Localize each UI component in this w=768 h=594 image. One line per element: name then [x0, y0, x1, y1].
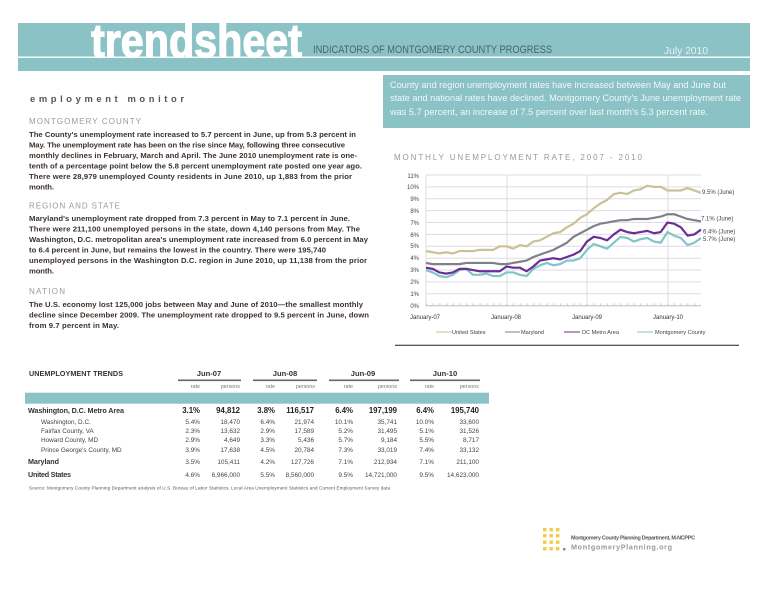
line chart: monthly unemployment rate	[407, 174, 735, 336]
row: United States: 9.5%	[338, 472, 353, 479]
column headers: rate	[191, 384, 200, 390]
paragraph	[29, 130, 362, 192]
row: United States	[28, 470, 479, 479]
row: Washington, D.C. Metro Area: 116,517	[286, 406, 314, 415]
row: Howard County, MD: 5.7%	[338, 437, 353, 444]
table: unemployment trends	[25, 369, 489, 490]
date: July 2010	[664, 46, 708, 57]
column headers: persons	[296, 384, 315, 390]
end labels: 6.4% (June)	[703, 230, 735, 236]
column headers: Jun-08	[273, 369, 297, 378]
row: Prince George's County, MD: 4.5%	[260, 447, 275, 454]
section heading: MONTGOMERY COUNTY	[29, 117, 142, 126]
paragraph: May. The unemployment rate has been on the rise since May, following three consecutive	[29, 140, 346, 150]
row: Washington, D.C.: 21,974	[294, 419, 314, 426]
y axis labels	[407, 174, 420, 310]
subtitle: INDICATORS OF MONTGOMERY COUNTY PROGRESS	[313, 44, 552, 56]
row: Washington, D.C.: Washington, D.C.	[41, 419, 91, 426]
row: Fairfax County, VA: 13,632	[220, 428, 240, 435]
teal band	[25, 393, 489, 404]
row: Washington, D.C.: 5.4%	[185, 419, 200, 426]
row: Howard County, MD: 8,717	[463, 437, 479, 444]
callout: summary: state and national rates have declined. Montgomery County's June unemployment rate	[390, 93, 741, 103]
paragraph: monthly declines in February, March and April. The June 2010 unemployment rate is one-	[29, 151, 357, 160]
paragraph: to 6.4 percent in June, but remains the lowest in the country. There were 195,740	[29, 246, 326, 254]
row: Washington, D.C. Metro Area: 94,812	[216, 406, 241, 415]
paragraph: Maryland's unemployment rate dropped from 7.3 percent in May to 7.1 percent in June.	[29, 214, 350, 223]
row: Maryland: 7.1%	[338, 459, 353, 466]
paragraph	[29, 300, 369, 330]
column headers: Jun-09	[351, 369, 375, 378]
y axis labels: 0%	[410, 304, 420, 310]
logo: Montgomery County Planning Department	[543, 528, 695, 552]
y axis labels: 9%	[410, 197, 420, 203]
row: Prince George's County, MD: 33,019	[377, 447, 397, 454]
row: Washington, D.C.: 10.1%	[335, 419, 353, 426]
y axis labels: 1%	[410, 292, 420, 298]
column headers: persons	[460, 384, 479, 390]
row: Maryland: 3.5%	[185, 459, 200, 466]
paragraph: The County's unemployment rate increased to 5.7 percent in June, up from 5.3 percent in	[29, 130, 356, 139]
row: Howard County, MD: 3.3%	[260, 437, 275, 444]
row: Washington, D.C. Metro Area: 3.8%	[257, 406, 275, 415]
column headers: persons	[378, 384, 397, 390]
row: Fairfax County, VA: 5.1%	[419, 428, 434, 435]
row: Prince George's County, MD: Prince George's County, MD	[41, 447, 122, 454]
row: Maryland: 7.1%	[419, 459, 434, 466]
text block: Montgomery County	[29, 117, 362, 192]
row: Fairfax County, VA	[41, 428, 479, 435]
row: Howard County, MD: 5.5%	[419, 437, 434, 444]
row: Washington, D.C.: 33,600	[459, 419, 479, 426]
row: United States: 5.5%	[260, 472, 275, 479]
y axis labels: 5%	[410, 244, 420, 250]
y axis labels: 3%	[410, 268, 420, 274]
header banner	[18, 14, 750, 71]
icon: yellow square grid	[543, 528, 565, 550]
line: Montgomery County	[426, 232, 701, 277]
row: Fairfax County, VA: 5.2%	[338, 428, 353, 435]
column headers: rate	[266, 384, 275, 390]
row: United States: 6,966,000	[212, 472, 240, 479]
row: United States: 14,623,000	[447, 472, 479, 479]
paragraph: There were 28,979 unemployed County residents in June 2010, up 1,883 from the prior	[29, 172, 352, 181]
source note: Source: Montgomery County Planning Department analysis of U.S. Bureau of Labor Statistics, Local Area Unemployment Statistics and Current Employment Survey data	[29, 486, 390, 490]
row: United States: 8,560,000	[286, 472, 314, 479]
row: United States: 4.6%	[185, 472, 200, 479]
row: Howard County, MD: 4,649	[224, 437, 240, 444]
row: Prince George's County, MD: 20,784	[294, 447, 314, 454]
department name: Montgomery County Planning Department, M-NCPPC	[571, 536, 695, 542]
row: Prince George's County, MD: 33,132	[459, 447, 479, 454]
end labels: 5.7% (June)	[703, 237, 735, 243]
paragraph: month.	[29, 182, 54, 192]
row: United States: United States	[28, 470, 71, 479]
row: Washington, D.C. Metro Area: 197,199	[369, 406, 398, 415]
column headers: rate	[344, 384, 353, 390]
x axis labels	[410, 315, 684, 321]
row: Washington, D.C. Metro Area: 3.1%	[182, 406, 200, 415]
row: Maryland: 212,934	[374, 459, 397, 466]
row: Prince George's County, MD: 7.4%	[419, 447, 434, 454]
row: Washington, D.C.: 10.0%	[416, 419, 434, 426]
chart title: MONTHLY UNEMPLOYMENT RATE, 2007 - 2010	[394, 153, 643, 162]
row: Howard County, MD: Howard County, MD	[41, 437, 98, 444]
paragraph	[29, 214, 369, 276]
row: Howard County, MD: 9,184	[381, 437, 397, 444]
row: Howard County, MD: 5,436	[298, 437, 314, 444]
legend: Maryland	[521, 330, 544, 336]
table title: UNEMPLOYMENT TRENDS	[29, 369, 123, 378]
column headers: Jun-07	[197, 369, 221, 378]
callout: summary	[383, 75, 750, 128]
row: Washington, D.C.: 6.4%	[260, 419, 275, 426]
row: Maryland: 4.2%	[260, 459, 275, 466]
column headers: persons	[221, 384, 240, 390]
title: trendsheet: trendsheet	[91, 14, 302, 67]
callout: summary: County and region unemployment rates have increased between May and June but	[390, 80, 726, 90]
text block: Nation	[29, 287, 369, 330]
end labels: 9.5% (June)	[702, 190, 734, 196]
x axis labels: January-08	[491, 315, 522, 321]
y axis labels: 8%	[410, 209, 420, 215]
y axis labels: 2%	[410, 280, 420, 286]
paragraph: tenth of a percentage point below the 5.8 percent unemployment rate posted one year ago.	[29, 162, 362, 170]
y axis labels: 4%	[410, 256, 420, 262]
row: Washington, D.C. Metro Area	[28, 406, 480, 415]
y axis labels: 10%	[407, 185, 420, 191]
line: Maryland	[426, 214, 701, 264]
column headers: Jun-10	[433, 369, 457, 378]
row: Prince George's County, MD: 3.9%	[185, 447, 200, 454]
end labels: 7.1% (June)	[701, 216, 733, 222]
row: Maryland	[28, 457, 479, 466]
y axis labels: 6%	[410, 233, 420, 239]
row: Fairfax County, VA: Fairfax County, VA	[41, 428, 94, 435]
legend	[436, 330, 706, 336]
paragraph: There were 211,100 unemployed persons in the state, down 4,140 persons from May. The	[29, 224, 361, 234]
y axis labels: 7%	[410, 221, 420, 227]
row: Fairfax County, VA: 31,495	[377, 428, 397, 435]
row: Fairfax County, VA: 31,526	[459, 428, 479, 435]
line: United States	[426, 186, 701, 253]
row: Maryland: 127,726	[291, 459, 314, 466]
row: Washington, D.C.: 35,741	[377, 419, 397, 426]
paragraph: unemployed persons in the Washington D.C. region in June 2010, up 11,138 from the prior	[29, 256, 367, 265]
row: Fairfax County, VA: 17,589	[294, 428, 314, 435]
x axis labels: January-09	[572, 315, 603, 321]
x axis labels: January-07	[410, 315, 441, 321]
legend: United States	[452, 330, 486, 336]
row: Maryland: Maryland	[28, 457, 59, 466]
legend: DC Metro Area	[582, 330, 620, 336]
paragraph: Washington, D.C. metropolitan area's unemployment rate increased from 6.0 percent in May	[29, 235, 369, 244]
row: United States: 14,721,000	[365, 472, 397, 479]
row: Howard County, MD: 2.9%	[185, 437, 200, 444]
section heading: REGION AND STATE	[29, 202, 120, 210]
row: Washington, D.C. Metro Area: 195,740	[451, 406, 480, 415]
row: United States: 9.5%	[419, 472, 434, 479]
text block: Region and State	[29, 202, 369, 276]
line: DC Metro Area	[426, 223, 701, 274]
row: Washington, D.C.: 18,470	[220, 419, 240, 426]
row: Maryland: 211,100	[456, 459, 479, 466]
row: Washington, D.C. Metro Area: Washington, D.C. Metro Area	[28, 406, 125, 415]
paragraph: The U.S. economy lost 125,000 jobs between May and June of 2010—the smallest monthly	[29, 300, 364, 309]
paragraph: decline since December 2009. The unemployment rate dropped to 9.5 percent in June, down	[29, 310, 369, 320]
row: Fairfax County, VA: 2.9%	[260, 428, 275, 435]
row: Washington, D.C. Metro Area: 6.4%	[335, 406, 353, 415]
row: Washington, D.C.	[41, 419, 479, 426]
row: Maryland: 105,411	[217, 459, 240, 466]
legend: Montgomery County	[655, 330, 706, 336]
row: Washington, D.C. Metro Area: 6.4%	[416, 406, 434, 415]
website: MontgomeryPlanning.org	[571, 542, 672, 552]
paragraph: from 9.7 percent in May.	[29, 321, 119, 330]
data lines	[426, 186, 701, 277]
end labels	[701, 190, 735, 243]
row: Prince George's County, MD: 17,638	[220, 447, 240, 454]
column headers: rate	[425, 384, 434, 390]
row: Prince George's County, MD	[41, 447, 479, 454]
row: Howard County, MD	[41, 437, 479, 444]
row: Prince George's County, MD: 7.3%	[338, 447, 353, 454]
callout: summary: was 5.7 percent, an increase of 7.5 percent over last month's 5.3 percent rate.	[389, 107, 708, 117]
y axis labels: 11%	[407, 174, 420, 180]
paragraph: month.	[29, 266, 54, 276]
column headers	[178, 369, 480, 390]
row: Fairfax County, VA: 2.3%	[185, 428, 200, 435]
heading: employment monitor: employment monitor	[30, 93, 184, 104]
x axis labels: January-10	[653, 315, 684, 321]
section heading: NATION	[29, 287, 65, 296]
